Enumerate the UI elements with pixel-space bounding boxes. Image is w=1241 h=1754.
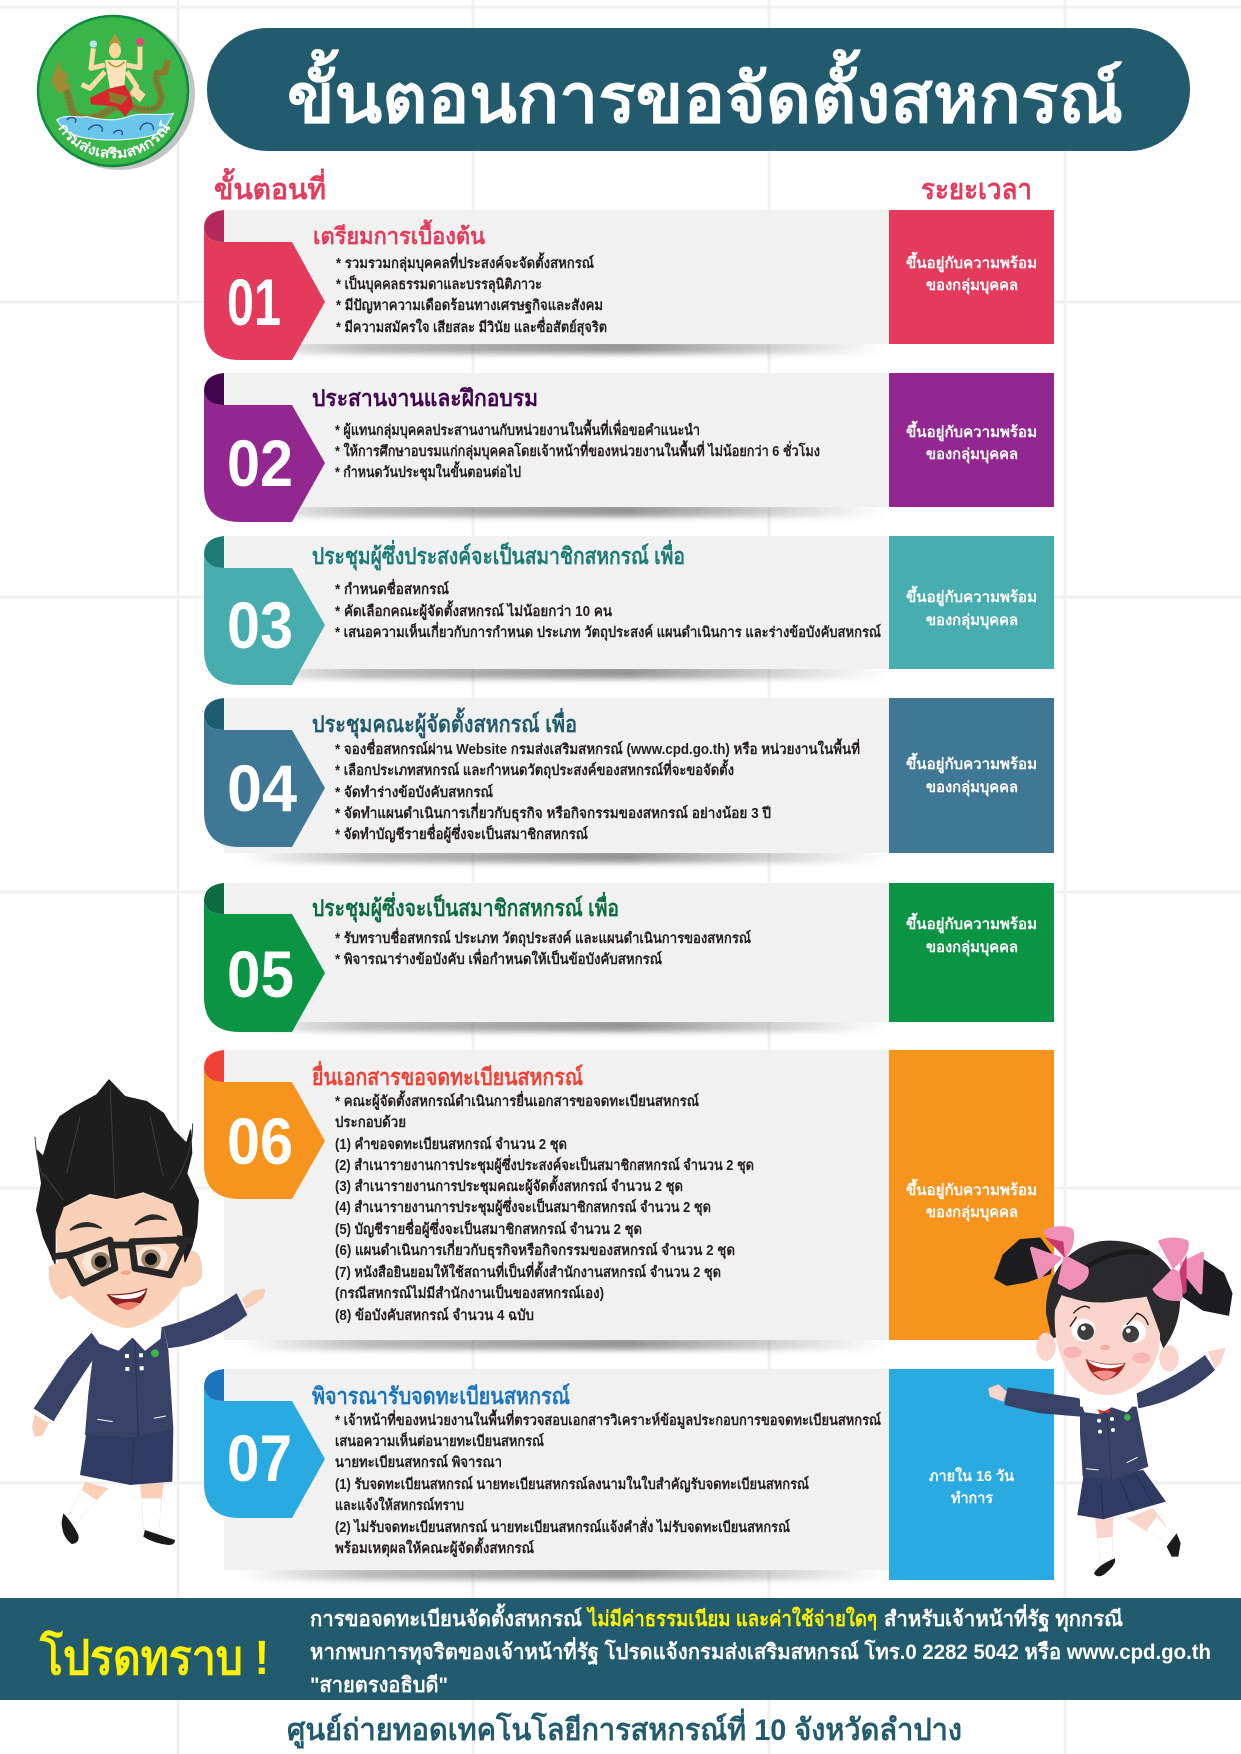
illustration: girl in uniform	[988, 1228, 1232, 1576]
panel: step 01: 01	[227, 265, 281, 339]
panel: step 04: * จัดทำร่างข้อบังคับสหกรณ์	[335, 783, 494, 801]
logo: cooperative promotion department seal	[36, 14, 195, 170]
panel: step 05: ขึ้นอยู่กับความพร้อม	[906, 912, 1037, 934]
panel: step 03: ของกลุ่มบุคคล	[926, 612, 1018, 630]
panel: step 05: 05	[227, 937, 294, 1011]
panel: step 01: ขึ้นอยู่กับความพร้อม	[906, 251, 1037, 273]
panel: step 06: (2) สำเนารายงานการประชุมผู้ซึ่งประสงค์จะเป็นสมาชิกสหกรณ์ จำนวน 2 ชุด	[335, 1154, 754, 1174]
panel: step 07: 07	[227, 1421, 292, 1495]
footer notice band: สำหรับเจ้าหน้าที่รัฐ ทุกกรณี	[884, 1603, 1123, 1633]
panel: step 06: (8) ข้อบังคับสหกรณ์ จำนวน 4 ฉบับ	[335, 1306, 534, 1324]
title banner	[207, 28, 1190, 151]
panel: step 05: ของกลุ่มบุคคล	[926, 939, 1018, 957]
panel: step 07: ทำการ	[951, 1490, 994, 1507]
panel: step 04: ขึ้นอยู่กับความพร้อม	[906, 752, 1037, 774]
panel: step 06: (7) หนังสือยินยอมให้ใช้สถานที่เป็นที่ตั้งสำนักงานสหกรณ์ จำนวน 2 ชุด	[335, 1261, 721, 1281]
panel: step 07: พร้อมเหตุผลให้คณะผู้จัดตั้งสหกรณ์	[335, 1537, 534, 1557]
panel: step 07: เสนอความเห็นต่อนายทะเบียนสหกรณ์	[335, 1431, 544, 1450]
panel: step 06: (5) บัญชีรายชื่อผู้ซึ่งจะเป็นสมาชิกสหกรณ์ จำนวน 2 ชุด	[335, 1218, 642, 1238]
panel: step 02: * ให้การศึกษาอบรมแก่กลุ่มบุคคลโดยเจ้าหน้าที่ของหน่วยงานในพื้นที่ ไม่น้อยกว่า 6 ชั่วโมง	[335, 440, 820, 460]
panel: step 07	[204, 1369, 1054, 1580]
footer notice band: การขอจดทะเบียนจัดตั้งสหกรณ์	[310, 1603, 582, 1631]
panel: step 05: * พิจารณาร่างข้อบังคับ เพื่อกำหนดให้เป็นข้อบังคับสหกรณ์	[335, 948, 662, 968]
heading: duration: ระยะเวลา	[921, 174, 1032, 206]
panel: step 07: และแจ้งให้สหกรณ์ทราบ	[335, 1496, 464, 1514]
bottom organisation line: ศูนย์ถ่ายทอดเทคโนโลยีการสหกรณ์ที่ 10 จังหวัดลำปาง	[287, 1708, 962, 1749]
panel: step 01	[204, 210, 1054, 360]
heading: steps: ขั้นตอนที่	[214, 167, 326, 206]
panel: step 06: (6) แผนดำเนินการเกี่ยวกับธุรกิจหรือกิจกรรมของสหกรณ์ จำนวน 2 ชุด	[335, 1239, 735, 1259]
panel: step 01: * มีปัญหาความเดือดร้อนทางเศรษฐกิจและสังคม	[336, 297, 603, 315]
panel: step 01: * มีความสมัครใจ เสียสละ มีวินัย และซื่อสัตย์สุจริต	[336, 316, 607, 336]
panel: step 04: * จัดทำแผนดำเนินการเกี่ยวกับธุรกิจ หรือกิจกรรมของสหกรณ์ อย่างน้อย 3 ปี	[335, 802, 771, 822]
panel: step 03: ประชุมผู้ซึ่งประสงค์จะเป็นสมาชิกสหกรณ์ เพื่อ	[312, 539, 685, 571]
logo: cooperative promotion department seal: กรมส่งเสริมสหกรณ์	[58, 120, 170, 158]
panel: step 07: (1) รับจดทะเบียนสหกรณ์ นายทะเบียนสหกรณ์ลงนามในใบสำคัญรับจดทะเบียนสหกรณ์	[335, 1475, 809, 1493]
panel: step 06: ยื่นเอกสารขอจดทะเบียนสหกรณ์	[312, 1060, 583, 1090]
panel: step 02: ประสานงานและฝึกอบรม	[312, 385, 538, 411]
panel: step 07: พิจารณารับจดทะเบียนสหกรณ์	[312, 1383, 570, 1409]
panel: step 05	[204, 883, 1054, 1032]
panel: step 03: * คัดเลือกคณะผู้จัดตั้งสหกรณ์ ไม่น้อยกว่า 10 คน	[335, 600, 612, 620]
panel: step 05: * รับทราบชื่อสหกรณ์ ประเภท วัตถุประสงค์ และแผนดำเนินการของสหกรณ์	[335, 927, 751, 947]
panel: step 04	[204, 698, 1054, 863]
panel: step 03: ขึ้นอยู่กับความพร้อม	[906, 585, 1037, 607]
panel: step 05: ประชุมผู้ซึ่งจะเป็นสมาชิกสหกรณ์ เพื่อ	[312, 891, 619, 923]
footer notice band: "สายตรงอธิบดี"	[310, 1673, 448, 1697]
panel: step 01: * รวมรวมกลุ่มบุคคลที่ประสงค์จะจัดตั้งสหกรณ์	[336, 252, 594, 272]
panel: step 07: นายทะเบียนสหกรณ์ พิจารณา	[335, 1453, 502, 1471]
panel: step 06: * คณะผู้จัดตั้งสหกรณ์ดำเนินการยื่นเอกสารขอจดทะเบียนสหกรณ์	[335, 1090, 699, 1110]
panel: step 04: ประชุมคณะผู้จัดตั้งสหกรณ์ เพื่อ	[312, 707, 577, 739]
panel: step 02	[204, 373, 1054, 522]
title banner: ขั้นตอนการขอจัดตั้งสหกรณ์	[287, 48, 1123, 137]
panel: step 06: ของกลุ่มบุคคล	[926, 1204, 1018, 1222]
panel: step 02: ของกลุ่มบุคคล	[926, 446, 1018, 464]
panel: step 06: ขึ้นอยู่กับความพร้อม	[906, 1178, 1037, 1200]
illustration: boy in uniform	[32, 1080, 265, 1545]
panel: step 06: (4) สำเนารายงานการประชุมผู้ซึ่งจะเป็นสมาชิกสหกรณ์ จำนวน 2 ชุด	[335, 1196, 711, 1216]
panel: step 07: (2) ไม่รับจดทะเบียนสหกรณ์ นายทะเบียนสหกรณ์แจ้งคำสั่ง ไม่รับจดทะเบียนสหกรณ์	[335, 1516, 790, 1536]
panel: step 04: 04	[227, 751, 297, 825]
panel: step 03: * เสนอความเห็นเกี่ยวกับการกำหนด ประเภท วัตถุประสงค์ แผนดำเนินการ และร่างข้อบังคับสหกรณ์	[335, 621, 881, 641]
panel: step 06	[204, 1050, 1054, 1350]
panel: step 06: (1) คำขอจดทะเบียนสหกรณ์ จำนวน 2 ชุด	[335, 1135, 567, 1153]
footer notice band: หากพบการทุจริตของเจ้าหน้าที่รัฐ โปรดแจ้งกรมส่งเสริมสหกรณ์ โทร.0 2282 5042 หรือ www.cpd.go.th	[310, 1636, 1211, 1666]
panel: step 06: (กรณีสหกรณ์ไม่มีสำนักงานเป็นของสหกรณ์เอง)	[335, 1283, 604, 1302]
panel: step 02: ขึ้นอยู่กับความพร้อม	[906, 420, 1037, 442]
panel: step 01: * เป็นบุคคลธรรมดาและบรรลุนิติภาวะ	[336, 274, 542, 293]
footer notice band: โปรดทราบ !	[39, 1629, 269, 1685]
panel: step 02: * ผู้แทนกลุ่มบุคคลประสานงานกับหน่วยงานในพื้นที่เพื่อขอคำแนะนำ	[335, 419, 700, 439]
panel: step 03	[204, 536, 1054, 685]
panel: step 06: 06	[227, 1104, 293, 1178]
panel: step 04: * จองชื่อสหกรณ์ผ่าน Website กรมส่งเสริมสหกรณ์ (www.cpd.go.th) หรือ หน่วยงานในพื้นที่	[335, 738, 860, 758]
panel: step 03: 03	[227, 588, 293, 662]
panel: step 04: ของกลุ่มบุคคล	[926, 779, 1018, 797]
panel: step 01: เตรียมการเบื้องต้น	[313, 219, 485, 249]
panel: step 03: * กำหนดชื่อสหกรณ์	[335, 578, 449, 598]
footer notice band: ไม่มีค่าธรรมเนียม และค่าใช้จ่ายใดๆ	[586, 1606, 877, 1631]
footer notice band	[0, 1598, 1241, 1700]
panel: step 04: * เลือกประเภทสหกรณ์ และกำหนดวัตถุประสงค์ของสหกรณ์ที่จะขอจัดตั้ง	[335, 759, 734, 779]
panel: step 07: ภายใน 16 วัน	[929, 1467, 1015, 1485]
panel: step 04: * จัดทำบัญชีรายชื่อผู้ซึ่งจะเป็นสมาชิกสหกรณ์	[335, 823, 588, 843]
panel: step 01: ของกลุ่มบุคคล	[926, 277, 1018, 295]
panel: step 06: ประกอบด้วย	[335, 1114, 406, 1131]
panel: step 06: (3) สำเนารายงานการประชุมคณะผู้จัดตั้งสหกรณ์ จำนวน 2 ชุด	[335, 1175, 683, 1195]
panel: step 02: 02	[227, 426, 293, 500]
panel: step 02: * กำหนดวันประชุมในขั้นตอนต่อไป	[335, 461, 521, 481]
panel: step 07: * เจ้าหน้าที่ของหน่วยงานในพื้นที่ตรวจสอบเอกสารวิเคราะห์ข้อมูลประกอบการขอจดทะเบียนสหกรณ์	[335, 1409, 881, 1429]
